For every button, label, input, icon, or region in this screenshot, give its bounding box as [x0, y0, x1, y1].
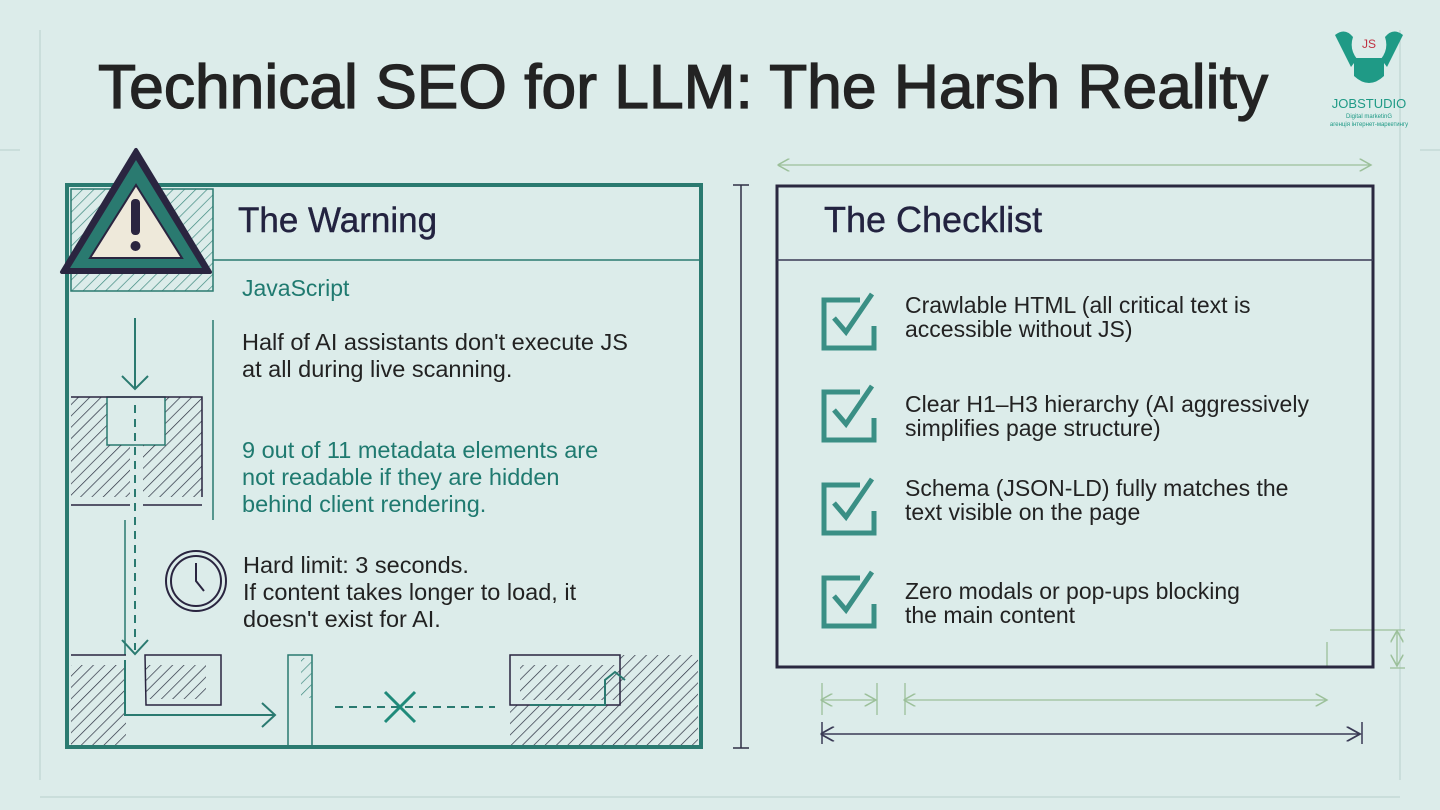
checklist items: Schema (JSON-LD) fully matches the — [905, 475, 1288, 501]
logo: JS — [1362, 37, 1376, 51]
title: Technical SEO for LLM: The Harsh Reality — [98, 53, 1268, 122]
checklist items — [905, 292, 1309, 628]
logo: агенція інтернет-маркетингу — [1330, 122, 1408, 128]
checklist items: simplifies page structure) — [905, 415, 1161, 441]
text block: half of AI: at all during live scanning. — [242, 356, 512, 382]
text block: hard limit: Hard limit: 3 seconds. — [243, 552, 469, 578]
heading: the warning: The Warning — [238, 201, 437, 240]
logo: Digital marketinG — [1346, 114, 1392, 120]
panel: warning — [67, 185, 701, 747]
panel: checklist — [777, 186, 1373, 667]
dimension arrows — [779, 165, 1405, 715]
checklist items: Zero modals or pop-ups blocking — [905, 578, 1240, 604]
text block: metadata: 9 out of 11 metadata elements are — [242, 437, 598, 463]
diagram: floor plan arrows — [71, 318, 698, 747]
text block: metadata: behind client rendering. — [242, 491, 486, 517]
checklist items: text visible on the page — [905, 499, 1140, 525]
checklist items: Clear H1–H3 hierarchy (AI aggressively — [905, 391, 1309, 417]
text block: metadata: not readable if they are hidden — [242, 464, 559, 490]
vertical dimension line — [733, 185, 749, 748]
logo: JOBSTUDIO — [1332, 96, 1406, 111]
text block: half of AI: Half of AI assistants don't execute JS — [242, 329, 628, 355]
text block: hard limit: doesn't exist for AI. — [243, 606, 441, 632]
heading: the checklist: The Checklist — [824, 199, 1042, 240]
logo — [1330, 31, 1408, 128]
icons: checkboxes — [824, 294, 874, 626]
icon: clock — [166, 551, 226, 611]
label: javascript: JavaScript — [242, 275, 350, 301]
checklist items: accessible without JS) — [905, 316, 1133, 342]
checklist items: the main content — [905, 602, 1076, 628]
icon: warning triangle — [62, 150, 210, 272]
text block: hard limit: If content takes longer to load, it — [243, 579, 577, 605]
checklist items: Crawlable HTML (all critical text is — [905, 292, 1250, 318]
